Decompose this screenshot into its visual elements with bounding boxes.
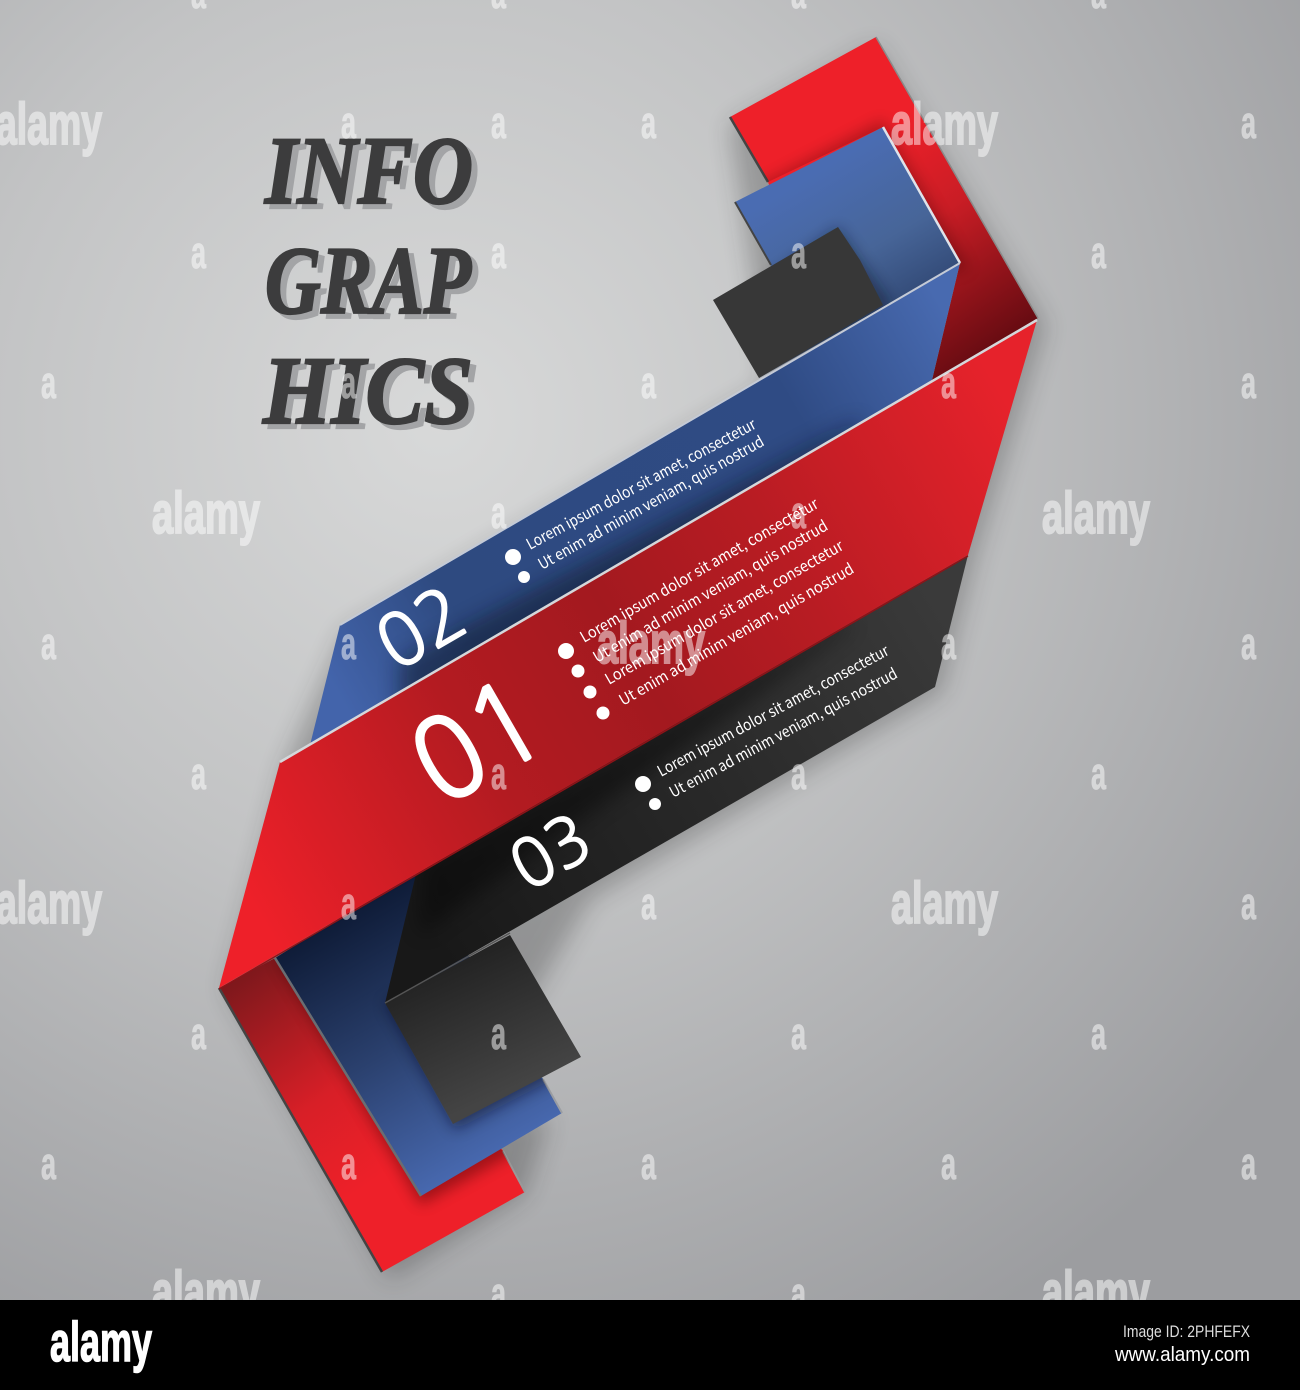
watermarks: a bbox=[491, 1008, 507, 1059]
watermarks: a bbox=[641, 97, 657, 148]
watermarks: a bbox=[41, 618, 57, 669]
title bbox=[262, 117, 479, 449]
watermarks: alamy bbox=[891, 871, 998, 936]
upper red fold bbox=[730, 37, 1038, 380]
watermarks: a bbox=[491, 227, 507, 278]
watermarks: a bbox=[641, 878, 657, 929]
text 03: Ut enim ad minim veniam, quis nostrud bbox=[665, 662, 901, 802]
watermarks: a bbox=[941, 357, 957, 408]
ribbon drop shadow bbox=[226, 45, 1046, 1280]
watermarks: a bbox=[1091, 1008, 1107, 1059]
number 03: 03 bbox=[499, 803, 602, 902]
watermarks: a bbox=[1241, 97, 1257, 148]
watermarks: a bbox=[791, 748, 807, 799]
bullets 03 bbox=[635, 776, 661, 810]
watermarks: a bbox=[191, 748, 207, 799]
watermarks: a bbox=[941, 618, 957, 669]
title: HICS bbox=[262, 337, 473, 444]
watermarks: alamy bbox=[891, 92, 998, 157]
watermarks: a bbox=[1241, 618, 1257, 669]
watermarks: alamy bbox=[152, 481, 260, 546]
watermarks: a bbox=[341, 357, 357, 408]
watermarks: a bbox=[341, 878, 357, 929]
watermarks: a bbox=[491, 487, 507, 538]
black band 03 bbox=[385, 555, 968, 1003]
text 01: Lorem ipsum dolor sit amet, consectetur bbox=[600, 534, 848, 689]
watermarks: a bbox=[791, 1268, 807, 1319]
watermarks: alamy bbox=[0, 92, 102, 157]
title: INFO bbox=[270, 122, 479, 229]
text 03: Lorem ipsum dolor sit amet, consectetur bbox=[653, 639, 893, 781]
title: HICS bbox=[268, 342, 479, 449]
item 02: number and text bbox=[364, 412, 768, 683]
watermarks: a bbox=[41, 357, 57, 408]
watermarks: a bbox=[641, 357, 657, 408]
upper blue fold bbox=[735, 127, 960, 378]
watermarks: a bbox=[791, 1008, 807, 1059]
text 01: Ut enim ad minim veniam, quis nostrud bbox=[614, 557, 858, 710]
title: INFO bbox=[264, 117, 473, 224]
watermarks: a bbox=[1241, 357, 1257, 408]
title: GRAP bbox=[265, 227, 472, 334]
watermarks: alamy bbox=[597, 611, 705, 676]
infographic ribbon bbox=[219, 37, 1038, 1272]
watermarks: a bbox=[191, 1008, 207, 1059]
watermarks: a bbox=[341, 1138, 357, 1189]
watermarks: a bbox=[491, 97, 507, 148]
watermarks: a bbox=[1091, 748, 1107, 799]
blue band 02 bbox=[310, 263, 960, 745]
item 01: number and text bbox=[394, 492, 858, 824]
watermarks: a bbox=[791, 487, 807, 538]
watermarks: a bbox=[341, 618, 357, 669]
watermarks: a bbox=[941, 1138, 957, 1189]
watermarks: a bbox=[491, 1268, 507, 1319]
footer logo: alamy bbox=[50, 1310, 152, 1373]
text 02: Lorem ipsum dolor sit amet, consectetur bbox=[522, 412, 760, 554]
image id: Image ID: 2PHFEFX bbox=[1123, 1322, 1250, 1341]
number 01: 01 bbox=[394, 661, 561, 824]
number 02: 02 bbox=[364, 574, 478, 683]
item 03: number and text bbox=[499, 639, 901, 902]
watermarks: alamy bbox=[1042, 1260, 1150, 1325]
watermarks: a bbox=[1241, 1138, 1257, 1189]
text 01 bbox=[576, 492, 858, 710]
bullets 01 bbox=[558, 643, 610, 720]
footer bar bbox=[0, 1300, 1300, 1390]
red band 01 bbox=[219, 320, 1037, 989]
lower black fold bbox=[385, 933, 581, 1124]
watermarks: alamy bbox=[1042, 481, 1150, 546]
upper black fold bbox=[713, 227, 892, 378]
watermarks: alamy bbox=[152, 1260, 260, 1325]
watermarks: a bbox=[191, 227, 207, 278]
watermarks: a bbox=[791, 227, 807, 278]
watermarks: a bbox=[1091, 227, 1107, 278]
lower red fold bbox=[219, 950, 525, 1272]
text 01: Lorem ipsum dolor sit amet, consectetur bbox=[576, 492, 823, 647]
watermarks: alamy bbox=[0, 871, 102, 936]
watermarks: a bbox=[341, 97, 357, 148]
watermarks: a bbox=[1241, 878, 1257, 929]
watermarks: a bbox=[641, 1138, 657, 1189]
bullets 02 bbox=[505, 549, 530, 583]
website: www.alamy.com bbox=[1114, 1344, 1250, 1366]
lower blue fold bbox=[275, 870, 590, 1196]
text 02: Ut enim ad minim veniam, quis nostrud bbox=[534, 430, 768, 574]
watermarks: a bbox=[491, 748, 507, 799]
text 01: Ut enim ad minim veniam, quis nostrud bbox=[588, 514, 832, 667]
title: GRAP bbox=[271, 232, 478, 339]
watermarks: a bbox=[41, 1138, 57, 1189]
